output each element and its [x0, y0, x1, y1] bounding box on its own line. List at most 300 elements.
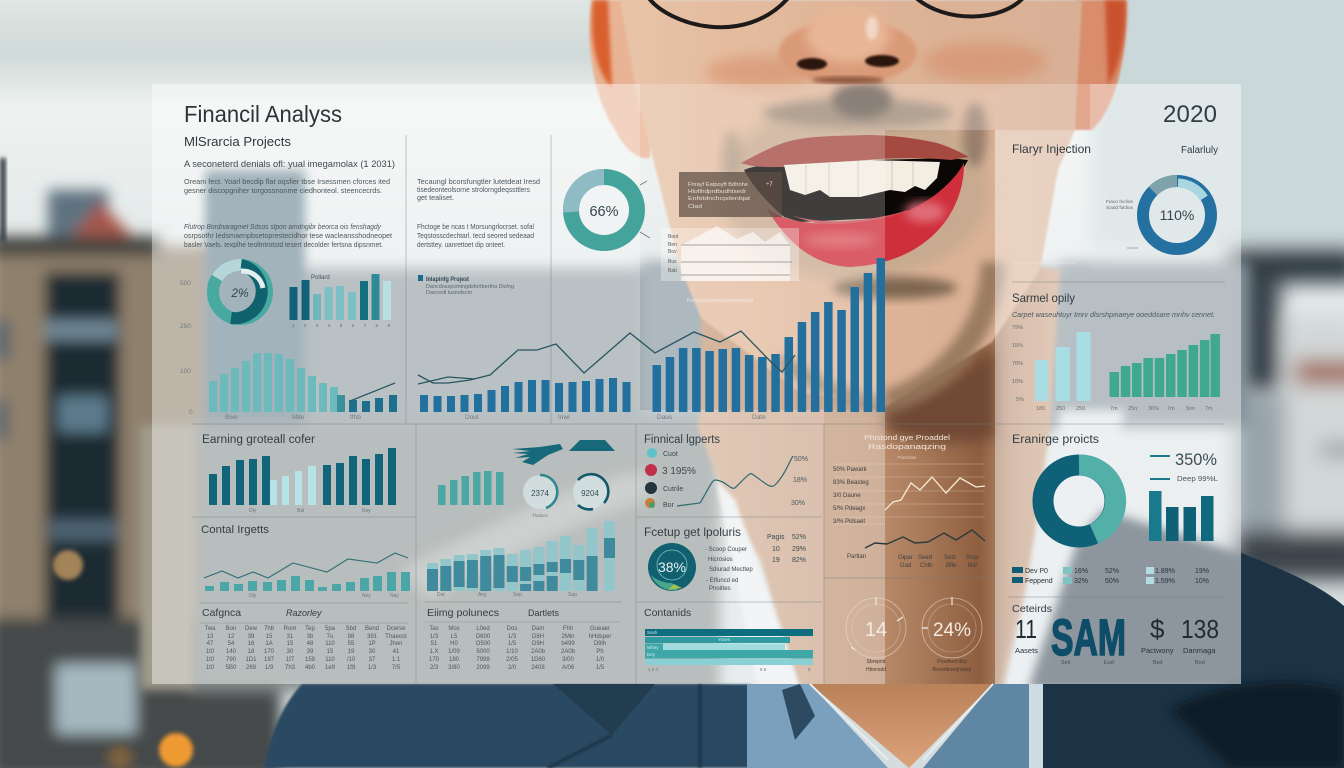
bar chart: four teal bars [1149, 491, 1214, 541]
table: cafgnca: 15 [327, 649, 334, 655]
table: eiimg polunecs [425, 607, 620, 671]
panel: chart on neck: Bfle [946, 563, 957, 569]
table: eiimg polunecs: 1/09 [448, 649, 460, 655]
table: eiimg polunecs: 170 [429, 657, 440, 663]
table: eiimg polunecs: Ph [596, 649, 604, 655]
stacked bar chart: Sep [513, 592, 522, 598]
panel: contal irgetts line and bar chart [201, 524, 410, 599]
table: cafgnca: 5pa [325, 626, 336, 632]
donut: 66%: 66% [589, 204, 619, 220]
panel: financial reports legend and line chart: Finnical lgperts [644, 434, 720, 446]
table: cafgnca: 1f7 [286, 657, 295, 663]
panel: contal irgetts line and bar chart: Contal Irgetts [201, 524, 270, 536]
panel: chart on neck: Gipar [898, 555, 913, 561]
table: cafgnca: 5B0 [226, 665, 237, 671]
panel: chart on neck: Bdr [968, 563, 977, 569]
stacked bar chart: Any [478, 592, 487, 598]
table: eiimg polunecs: 1/10 [506, 649, 518, 655]
text block: projects intro: Oream fect. Yoarl becdip flat oqsfier tbse Irsessmen cforces ited [184, 177, 390, 186]
panel: earning grotetall cofer: Dly [249, 508, 257, 514]
gauges: 14 and 24%: 24% [933, 620, 971, 641]
panel: ceteirds KPI row [1012, 603, 1219, 666]
legend: mapping project: Dancdosspsmtngdsfortbertha Dicfng [426, 284, 514, 290]
donut: 110% [1143, 181, 1211, 249]
horizontal bars: contanids [644, 607, 813, 672]
bar chart: small multi colour [290, 274, 391, 328]
year heading: 2020 [1163, 101, 1217, 128]
table: cafgnca [200, 607, 408, 671]
bar chart: small multi colour: 1 2 3 4 5 6 7 8 9 [292, 323, 390, 328]
bar chart: tall blue bars over face [652, 258, 885, 412]
panel: sarmel opily: Carpet waseuhtuyr tmrv dlsrshpinaeye ooeddsare mnhv cennet. [1012, 310, 1215, 319]
table: cafgnca: Twa [204, 626, 216, 632]
legend table: 52% [1105, 568, 1119, 575]
panel: financial reports legend and line chart: 3 195% [662, 466, 696, 477]
table: cafgnca: Cafgnca [202, 607, 241, 619]
legend table: 10% [1195, 578, 1209, 585]
table: eiimg polunecs: b499 [561, 641, 575, 647]
panel: sarmel opily: 250 [1076, 406, 1085, 412]
mini area chart card: Bab [668, 268, 677, 274]
dark note card over mouth: Hlofihdprdbudhtsedr [688, 189, 746, 195]
table: cafgnca: Bend [365, 626, 379, 632]
panel: chart on neck: Partlan [847, 554, 866, 560]
table: cafgnca: 1t0 [206, 657, 215, 663]
horizontal bars: contanids: Yoses [718, 637, 731, 642]
table: cafgnca: 54 [228, 641, 235, 647]
legend table: 16% [1074, 568, 1088, 575]
panel: chart on neck: 50% Pawark [833, 467, 868, 473]
table: eiimg polunecs: 2A0b [561, 649, 576, 655]
panel: ceteirds KPI row: Pactwony [1141, 646, 1174, 655]
legend table: 1.59% [1155, 578, 1175, 585]
table: eiimg polunecs: hHdsper [589, 634, 611, 640]
table: cafgnca: 41 [393, 649, 400, 655]
panel: ceteirds KPI row: 11 [1015, 614, 1037, 644]
panel: sarmel opily: 5nn [1186, 406, 1195, 412]
table: eiimg polunecs: 1/3 [508, 634, 517, 640]
panel: fcetup get lpoluris: 52% [792, 534, 806, 541]
panel: sarmel opily: 250 [1056, 406, 1065, 412]
table: cafgnca: 30 [287, 649, 294, 655]
legend: mapping project: Inlapinfg Projest [426, 276, 470, 283]
panel: fcetup get lpoluris: Sdiurad Mecttep [709, 567, 753, 573]
gauges: two small rings: 2374 [531, 489, 549, 498]
donut: 110%: 110% [1160, 207, 1194, 223]
chart axis labels: Daus [657, 414, 673, 421]
table: cafgnca: 1t0 [206, 649, 215, 655]
table: cafgnca: 13 [207, 634, 214, 640]
table: cafgnca: 1D1 [245, 657, 257, 663]
panel: ceteirds KPI row: Danmaga [1183, 646, 1216, 655]
table: cafgnca: 110 [325, 657, 335, 663]
table: cafgnca: 4b0 [305, 665, 316, 671]
panel: flaryr injection: Fiaco hiclios [1106, 199, 1134, 204]
bar chart: light bars [1035, 332, 1090, 401]
panel: eranirge proicts: Deep 99%L [1177, 474, 1218, 483]
panel: chart on neck: Seed [918, 555, 932, 561]
panel: contal irgetts line and bar chart: Dly [249, 593, 257, 599]
chart axis labels: 0 [189, 409, 193, 416]
table: cafgnca: 391 [367, 634, 378, 640]
panel: ceteirds KPI row: Bod [1195, 660, 1205, 666]
gauges: two small rings: Tlodsce [532, 513, 548, 518]
chart axis labels: 100 [180, 368, 191, 375]
table: cafgnca: 1A [265, 641, 273, 647]
legend table [1012, 567, 1209, 585]
table: eiimg polunecs: Fhh [563, 626, 573, 632]
table: eiimg polunecs: 2/3 [430, 665, 439, 671]
table: cafgnca: Bon [226, 626, 236, 632]
lips and teeth [744, 158, 968, 222]
panel: sarmel opily [1012, 291, 1220, 412]
donut: 66% [571, 177, 650, 243]
panel: ceteirds KPI row: Bsd [1153, 660, 1162, 666]
table: eiimg polunecs: A/06 [562, 665, 575, 671]
panel: chart on neck: Phistond gye Proaddel [864, 433, 950, 442]
panel: fcetup get lpoluris: 29% [792, 546, 806, 553]
bar chart: green bars [1110, 334, 1220, 397]
panel: sarmel opily: 180 [1036, 406, 1045, 412]
panel: fcetup get lpoluris: 10 [772, 546, 780, 553]
donut: 38% [648, 543, 696, 591]
chart axis labels: Dout [465, 414, 479, 421]
panel: chart on neck: Setz [944, 555, 956, 561]
dark note card over mouth: Clad [688, 204, 702, 210]
text block: projects intro: osrpsothr Iedsmaenpbsetoprestecidhor tese wacleansshodneopet [184, 231, 392, 240]
horizontal bars: contanids: 5 6 [760, 667, 767, 672]
legend table: 1.89% [1155, 568, 1175, 575]
table: eiimg polunecs: Dos [507, 626, 517, 632]
table: eiimg polunecs: 2099 [476, 665, 490, 671]
line chart across centre [418, 331, 795, 384]
table: cafgnca: /10 [347, 657, 356, 663]
panel: financial reports legend and line chart: Bor [663, 502, 675, 509]
text block: middle column: Teqstosscdechtarl. tecd seored sedeaad [417, 231, 534, 240]
left city [0, 190, 280, 768]
table: eiimg polunecs: 2/05 [506, 657, 518, 663]
table: cafgnca: 3b [307, 634, 314, 640]
panel: fcetup get lpoluris: - Etfuncd ed [706, 578, 738, 584]
table: eiimg polunecs: D8H [532, 634, 544, 640]
table: cafgnca: 31 [287, 634, 294, 640]
table: eiimg polunecs: D600 [476, 634, 491, 640]
panel: flaryr injection: Flaryr Injection [1012, 142, 1091, 156]
panel: flaryr injection [1012, 142, 1219, 263]
mini area chart card: Bus [668, 259, 677, 265]
panel: sarmel opily: Sarmel opily [1012, 291, 1075, 305]
gauges: 14 and 24%: Sbrepnd [867, 659, 886, 665]
table: eiimg polunecs: 1/3 [430, 634, 439, 640]
table: eiimg polunecs: 51 [431, 641, 438, 647]
dark note card over mouth: ÷7 [766, 182, 773, 188]
donut: 38%: 38% [658, 559, 686, 575]
panel: earning grotetall cofer [202, 434, 396, 514]
chart axis labels: 500 [180, 280, 191, 287]
table: cafgnca: Dew [245, 626, 258, 632]
table: eiimg polunecs: Gueaer [590, 626, 610, 632]
table: cafgnca: 790 [226, 657, 237, 663]
legend table: Feppend [1025, 578, 1053, 585]
legend table: 32% [1074, 578, 1088, 585]
panel: earning grotetall cofer: Bal [297, 508, 304, 514]
nose [779, 20, 917, 84]
panel: fcetup get lpoluris: Pnoittes [709, 586, 731, 592]
title: Financil Analyss [184, 101, 342, 127]
panel: fcetup get lpoluris [644, 525, 806, 592]
table: cafgnca: 19 [348, 649, 355, 655]
donut: 2%: 2% [230, 286, 249, 300]
chart axis labels: Date [752, 414, 766, 421]
table: eiimg polunecs: 3/80 [448, 665, 460, 671]
panel: ceteirds KPI row: Eud [1104, 660, 1114, 666]
donut: 2% [213, 265, 267, 319]
table: eiimg polunecs: 1/5 [596, 665, 605, 671]
horizontal bars: contanids: Sosh [647, 630, 658, 635]
glasses [648, 0, 1024, 27]
table: cafgnca: Sbd [346, 626, 356, 632]
text block: middle column: get tealiset. [417, 193, 454, 202]
panel: eranirge proicts [1012, 434, 1218, 585]
table: eiimg polunecs: H0 [450, 641, 458, 647]
table: eiimg polunecs: Mos [448, 626, 460, 632]
table: eiimg polunecs: L0ed [476, 626, 490, 632]
panel: eranirge proicts: 350% [1175, 450, 1217, 469]
dark note card over mouth: Fhrayf Eatpoyft Bdhnhe [688, 182, 748, 188]
table: cafgnca: Tep [305, 626, 315, 632]
table: eiimg polunecs: 1/0 [596, 657, 605, 663]
text block: middle column: tisedeonteolsorne strolorngdeqssttlers [417, 185, 530, 194]
mini area chart card: Boot [668, 234, 679, 240]
table: cafgnca: 15 [287, 641, 294, 647]
mini area chart card: Bov [668, 249, 677, 255]
panel: chart on neck: Gad [900, 563, 911, 569]
table: eiimg polunecs: 180 [449, 657, 460, 663]
panel: ceteirds KPI row: SAM [1051, 609, 1126, 666]
table: cafgnca: 12 [228, 634, 235, 640]
table: eiimg polunecs: Dartlets [528, 608, 560, 618]
panel: financial reports legend and line chart: 50% [794, 456, 808, 463]
panel: financial reports legend and line chart: Cutrile [663, 486, 683, 493]
panel: sarmel opily: 7m [1110, 406, 1118, 412]
mini area chart card: Frctdptzsvprsstavnlqtreprp [687, 298, 753, 304]
panel: ceteirds KPI row: 138 [1181, 614, 1219, 644]
table: cafgnca: 15 [266, 634, 273, 640]
panel: financial reports legend and line chart: 18% [793, 477, 807, 484]
text block: projects intro: gesner discopgniher torgossnonme ciedhonteol. steencecrds. [184, 186, 382, 195]
translucent dashboard panel veil [152, 84, 1241, 684]
text block: projects intro: Flutrop Bordnaragmel Sdsos stpon amdngibr beorca ois fenshagdy [184, 222, 381, 231]
panel: fcetup get lpoluris: 19 [772, 557, 780, 564]
panel: chart on neck: Chlb [920, 563, 933, 569]
gauges: 14 and 24% [846, 597, 982, 673]
face [620, 0, 1082, 406]
text block: projects intro [184, 135, 395, 249]
table: cafgnca: 170 [264, 649, 275, 655]
jacket and shirt [264, 684, 750, 768]
legend table: 50% [1105, 578, 1119, 585]
panel: chart on neck: 3/% Pidsaet [833, 519, 865, 525]
table: eiimg polunecs: 3/00 [562, 657, 574, 663]
panel: eranirge proicts: Eranirge proicts [1012, 434, 1099, 446]
table: cafgnca: Jhen [389, 641, 403, 647]
gauges: 14 and 24%: Pnsdhed dbp [937, 659, 967, 665]
panel: contal irgetts line and bar chart: Ney [362, 593, 371, 599]
gauges: 14 and 24%: 14 [865, 619, 887, 641]
table: cafgnca: 1t0 [206, 665, 215, 671]
table: cafgnca: 7/5 [392, 665, 401, 671]
text block: middle column: dertsttey. uanrettoet dip onteet. [417, 240, 505, 249]
panel: chart on neck: 3/0 Daune [833, 493, 861, 499]
panel: contal irgetts line and bar chart: Nay [390, 593, 399, 599]
dark note card over mouth: Enfotdnchcpdenlqat [688, 196, 751, 202]
dark note card over mouth [679, 172, 782, 217]
table: cafgnca: 110 [325, 641, 335, 647]
legend: mapping project: Davcestl tusesfecto [426, 290, 472, 296]
text block: middle column: Fhctoge be ncas t Morsungrlocrset. sofal [417, 222, 534, 231]
legend: mapping project [418, 275, 514, 296]
table: cafgnca: 7hb [264, 626, 275, 632]
panel: fcetup get lpoluris: · Scoop Couper [705, 547, 747, 553]
panel: financial reports legend and line chart: Cuot [663, 451, 678, 458]
panel: sarmel opily: 10% [1012, 379, 1023, 385]
panel: chart on neck: Snqr [966, 555, 979, 561]
table: eiimg polunecs: L5 [451, 634, 458, 640]
table: eiimg polunecs: 5000 [476, 649, 490, 655]
panel: earning grotetall cofer: Bay [362, 508, 371, 514]
table: cafgnca: 16 [248, 641, 255, 647]
table: cafgnca: 18 [248, 649, 255, 655]
horizontal bars: contanids: Dey [647, 652, 656, 657]
table: eiimg polunecs: O500 [476, 641, 491, 647]
stacked bar chart: Dat [437, 592, 445, 598]
under-panel blurred tones [140, 170, 1250, 692]
gauges: 14 and 24%: Ressdtronqhsdsp [933, 667, 972, 673]
gauges: two small rings: 9204 [581, 489, 599, 498]
mini area chart card [661, 226, 799, 304]
chart axis labels: Bwe [225, 414, 238, 421]
panel: earning grotetall cofer: Earning groteall cofer [202, 434, 315, 446]
panel: ceteirds KPI row: Sml [1061, 660, 1070, 666]
legend table: 19% [1195, 568, 1209, 575]
panel: sarmel opily: 5% [1016, 397, 1024, 403]
chart axis labels: Inwr [558, 414, 571, 421]
table: cafgnca: 48 [307, 641, 314, 647]
table: cafgnca: 39 [307, 649, 314, 655]
panel: sarmel opily: 7m [1167, 406, 1175, 412]
table: cafgnca: 1/9 [265, 665, 274, 671]
right collar and jacket seen through panel [1003, 410, 1125, 690]
table: cafgnca: 269 [246, 665, 257, 671]
table: cafgnca: 1e9 [325, 665, 336, 671]
horizontal bars: contanids: 1 0 4 [648, 667, 659, 672]
panel: sarmel opily: 7m [1205, 406, 1213, 412]
table: cafgnca: 47 [207, 641, 214, 647]
table: cafgnca: Dcerse [386, 626, 406, 632]
stacked bar chart [427, 521, 615, 598]
chart axis labels [180, 280, 766, 421]
panel: fcetup get lpoluris: Hicrosios [708, 557, 733, 563]
table: cafgnca: Rom [284, 626, 296, 632]
panel: chart on neck: 5/% Pdeagx [833, 506, 865, 512]
panel: ceteirds KPI row: $ [1150, 614, 1165, 644]
panel: chart on neck: Rasdopanaqzing [868, 444, 946, 451]
chart axis labels: 250 [180, 323, 191, 330]
table: cafgnca: 98 [348, 634, 355, 640]
table: eiimg polunecs: 1.X [429, 649, 439, 655]
table: eiimg polunecs: Tas [429, 626, 439, 632]
text block: projects intro: A seconeterd denials ofl: yual imegamolax (1 2031) [184, 159, 395, 170]
stubble zones [721, 100, 989, 280]
table: eiimg polunecs: 2A0b [531, 649, 546, 655]
horizontal bars: contanids: Whey [647, 645, 659, 650]
table: cafgnca: 55 [348, 641, 355, 647]
text block: middle column [417, 177, 540, 249]
table: cafgnca: 1:1 [392, 657, 401, 663]
neck [697, 260, 1060, 690]
panel: chart on neck: 83% Beasteg [833, 480, 869, 486]
panel: ceteirds KPI row: Aasets [1015, 646, 1038, 655]
table: eiimg polunecs: 2/0 [508, 665, 517, 671]
horizontal bars: contanids: Contanids [644, 607, 691, 619]
stacked bar chart: Sap [568, 592, 577, 598]
ears [589, 0, 660, 158]
panel: flaryr injection: Sould fuldios [1106, 205, 1134, 210]
table: eiimg polunecs: 2408 [531, 665, 545, 671]
panel: chart on neck [833, 433, 985, 569]
chart axis labels: Mlte [292, 414, 305, 421]
panel: financial reports legend and line chart: 30% [791, 500, 805, 507]
table: eiimg polunecs: Dam [532, 626, 544, 632]
table: eiimg polunecs: 1D60 [531, 657, 546, 663]
panel: chart on neck: Pratsdate [897, 455, 917, 460]
bar chart: small teal [438, 471, 504, 505]
table: cafgnca: 197 [264, 657, 275, 663]
donut: big [1043, 465, 1116, 537]
panel dividers [192, 135, 1225, 684]
table: eiimg polunecs: 7998 [476, 657, 490, 663]
text block: middle column: Tecaungl bcorsfungtler lutetdeat Iresd [417, 177, 540, 186]
chart axis labels: tfhb [350, 414, 361, 421]
table: cafgnca: 1P [368, 641, 376, 647]
panel: fcetup get lpoluris: 82% [792, 557, 806, 564]
text block: projects intro: MlSrarcia Projects [184, 135, 291, 149]
panel: sarmel opily: 36% [1148, 406, 1159, 412]
gauges: 14 and 24%: Hbonsdd [866, 667, 886, 673]
text block: projects intro: basler Vaels. texplhe teoltntrotstd tesert decolder fertsna dipsnmet. [184, 240, 383, 249]
table: eiimg polunecs: 2Min [561, 634, 575, 640]
icons: hand and trapezoid [512, 440, 615, 465]
panel: sarmel opily: 15% [1012, 343, 1023, 349]
table: cafgnca: 7u [327, 634, 333, 640]
panel: flaryr injection: Falarluly [1181, 144, 1219, 156]
table: cafgnca: Razorley [286, 608, 322, 618]
table: eiimg polunecs: D9H [532, 641, 544, 647]
table: cafgnca: 159 [305, 657, 316, 663]
panel: financial reports legend and line chart [644, 434, 808, 509]
table: cafgnca: 30 [369, 649, 376, 655]
legend table: Dev P0 [1025, 568, 1048, 575]
table: cafgnca: 37 [369, 657, 376, 663]
table: eiimg polunecs: Eiimg polunecs [427, 607, 499, 619]
right city [1230, 250, 1344, 580]
panel: sarmel opily: 25n [1128, 406, 1137, 412]
table: cafgnca: 39 [248, 634, 255, 640]
table: eiimg polunecs: D9ih [594, 641, 606, 647]
table: cafgnca: 1f9 [347, 665, 356, 671]
table: eiimg polunecs: 1/5 [508, 641, 517, 647]
panel: fcetup get lpoluris: Pagis [767, 534, 785, 541]
